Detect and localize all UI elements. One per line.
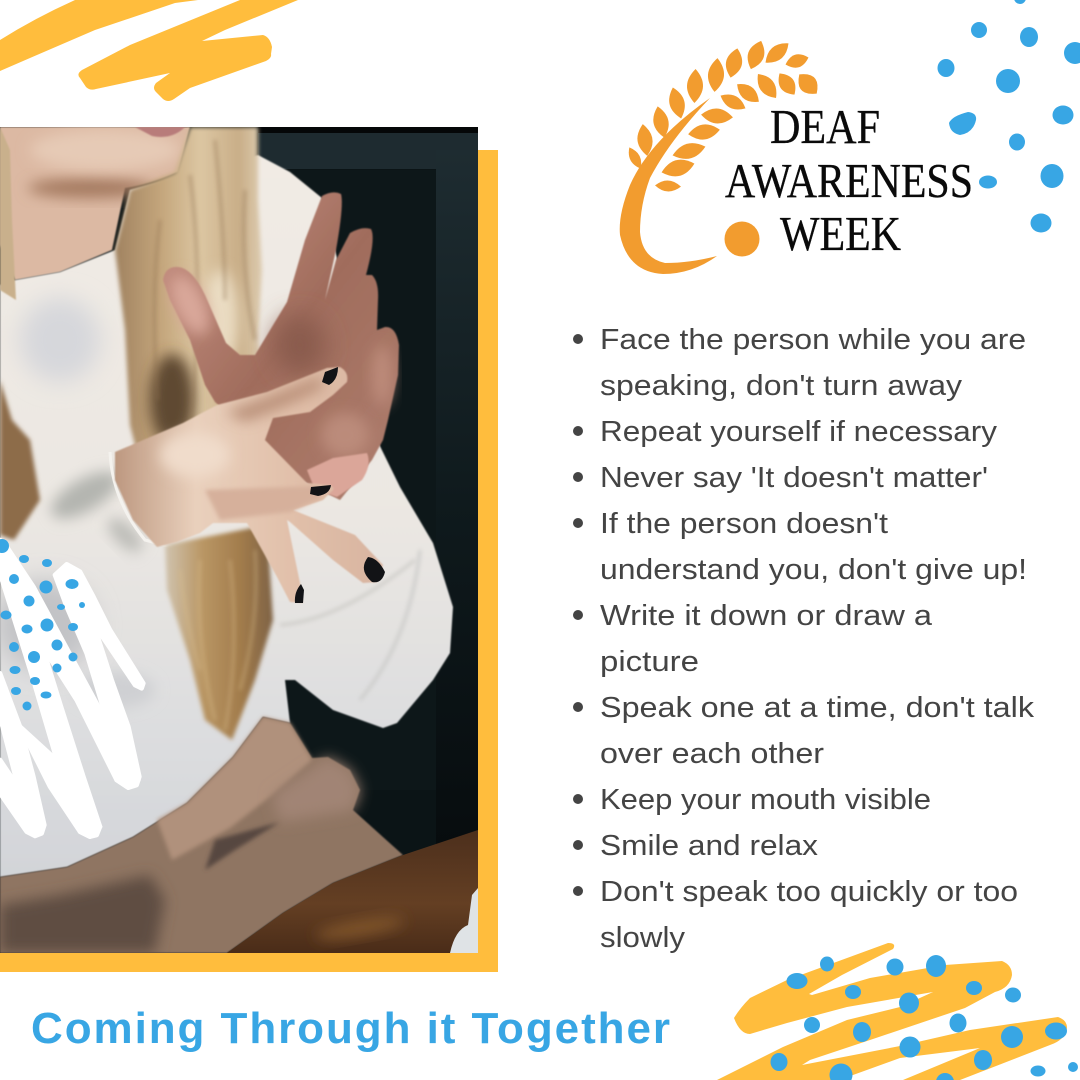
bullet text: Repeat yourself if necessary — [600, 416, 998, 448]
photo: back hand — [163, 192, 399, 500]
logo: wordmark: AWARENESS — [725, 153, 973, 208]
bullet markers — [573, 334, 583, 896]
decoration: top-right blue dots — [938, 0, 1080, 232]
decoration: top-left yellow brush strokes — [0, 0, 298, 101]
photo: table — [227, 830, 478, 953]
logo: dot — [724, 222, 760, 256]
photo: sweater — [0, 155, 453, 877]
decoration: bottom-right yellow brush strokes — [717, 943, 1067, 1080]
logo: wheat leaves — [625, 38, 823, 192]
logo: wordmark — [725, 99, 973, 261]
logo: Deaf Awareness Week — [620, 38, 973, 274]
bullet text: Smile and relax — [600, 830, 819, 862]
logo: wordmark: WEEK — [780, 206, 901, 261]
bullet text: speaking, don't turn away — [600, 370, 963, 402]
bullet text — [600, 324, 1035, 954]
logo: wheat stem — [620, 98, 717, 274]
yellow frame behind photo — [0, 150, 498, 972]
bullet text: Speak one at a time, don't talk — [600, 692, 1035, 724]
bullet text: Keep your mouth visible — [600, 784, 931, 816]
bullet text: Face the person while you are — [600, 324, 1026, 356]
tagline: Coming Through it Together — [31, 1004, 670, 1053]
bullet text: Never say 'It doesn't matter' — [600, 462, 988, 494]
bullet text: Don't speak too quickly or too — [600, 876, 1018, 908]
bullet text: slowly — [600, 922, 686, 954]
photo: hair above hand — [0, 127, 270, 540]
bullet text: over each other — [600, 738, 824, 770]
logo: wordmark: DEAF — [770, 99, 880, 154]
photo: hands signing — [0, 127, 478, 953]
bullet text: picture — [600, 646, 699, 678]
bullet text: If the person doesn't — [600, 508, 888, 540]
photo: trousers — [0, 717, 403, 953]
photo: hair below hand — [165, 525, 273, 740]
photo: chin and neck — [0, 127, 190, 280]
photo: front hand — [115, 367, 383, 603]
bullet text: Write it down or draw a — [600, 600, 933, 632]
decoration: blue dots on scribble — [0, 539, 85, 710]
photo: black nails — [295, 367, 385, 603]
decoration: bottom-right blue dots — [770, 955, 1078, 1080]
bullet list: communication tips — [573, 324, 1035, 954]
decoration: white scribble over photo — [0, 540, 143, 837]
bullet text: understand you, don't give up! — [600, 554, 1027, 586]
